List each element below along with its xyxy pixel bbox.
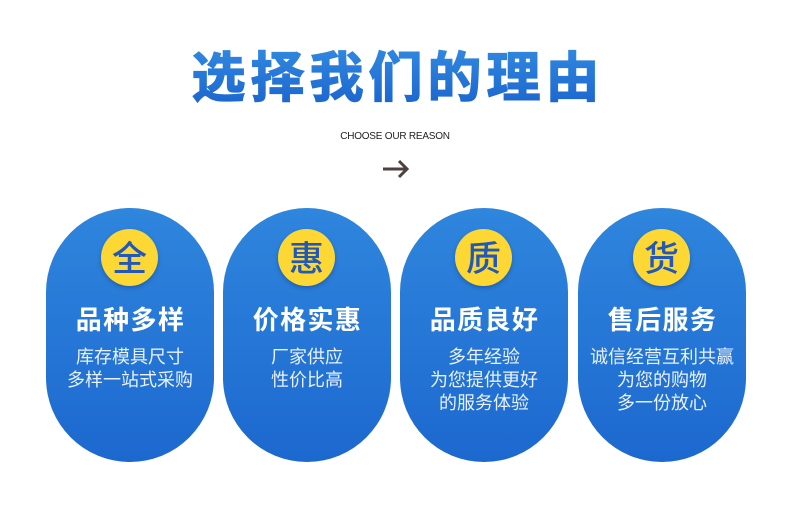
panel: service [578, 208, 746, 462]
icon: badge 货 [633, 229, 690, 286]
heading: variety: 品种多样 [76, 305, 185, 335]
text: price [271, 347, 343, 390]
panel: quality [400, 208, 568, 462]
panel: variety [46, 208, 214, 462]
text: quality: 为您提供更好 [430, 370, 538, 390]
text: variety: 多样一站式采购 [67, 370, 193, 390]
panel: price [223, 208, 391, 462]
text: service: 诚信经营互利共赢 [590, 347, 734, 367]
text: quality: 多年经验 [448, 347, 520, 367]
text: price: 性价比高 [271, 370, 343, 390]
icon: badge 货: 货 [644, 240, 679, 279]
text: price: 厂家供应 [271, 347, 343, 367]
title: 选择我们的理由 [192, 48, 604, 108]
text: service: 多一份放心 [617, 393, 707, 413]
icon: badge 全 [101, 229, 158, 286]
heading: quality: 品质良好 [430, 305, 539, 335]
text: quality: 的服务体验 [439, 393, 529, 413]
icon: badge 惠: 惠 [289, 240, 324, 279]
text: variety: 库存模具尺寸 [76, 347, 184, 367]
text: service [590, 347, 734, 413]
text: variety [67, 347, 193, 390]
heading: service: 售后服务 [608, 305, 717, 335]
icon: badge 惠 [278, 229, 335, 286]
heading: price: 价格实惠 [253, 305, 362, 335]
icon: badge 全: 全 [112, 240, 147, 279]
icon: badge 质: 质 [466, 240, 501, 279]
text: service: 为您的购物 [617, 370, 707, 390]
icon: arrow [383, 160, 409, 178]
text: quality [430, 347, 538, 413]
subtitle: CHOOSE OUR REASON [340, 131, 450, 142]
icon: badge 质 [455, 229, 512, 286]
